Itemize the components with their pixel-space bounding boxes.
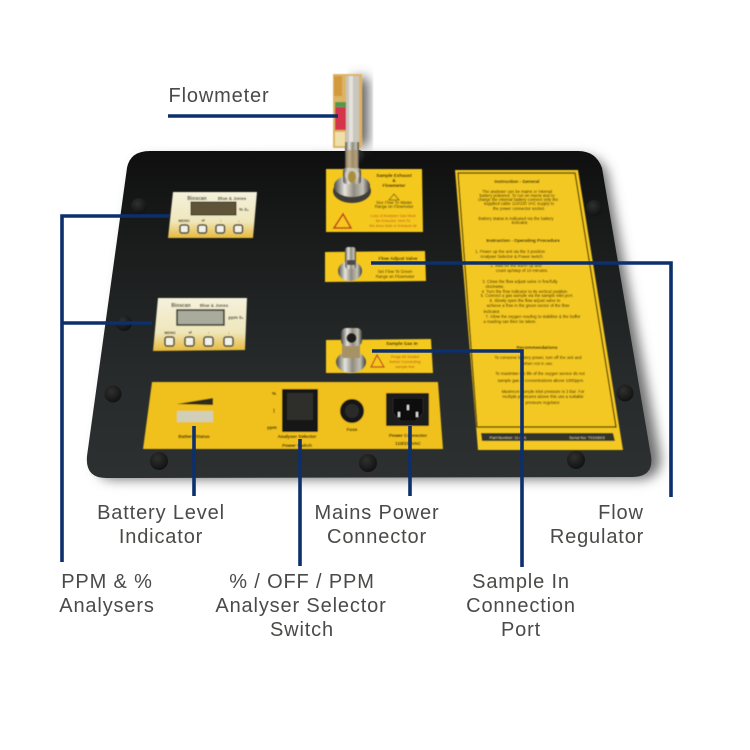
instructions label: when not in use.	[523, 361, 553, 366]
instructions label: charge the internal battery connect only the	[478, 197, 559, 202]
sample gas in label: Purge All Sealed	[391, 355, 419, 359]
power connector	[386, 393, 429, 446]
label: mains power connector: Mains Power	[315, 502, 439, 524]
selector switch: %	[272, 391, 276, 396]
fuse	[340, 399, 364, 432]
selector switch: |	[273, 408, 275, 413]
callout line: selector switch	[298, 439, 302, 566]
battery level indicator	[177, 398, 213, 439]
instructions label: 6. Slowly open the flow adjust valve to	[490, 298, 561, 303]
label: sample in port: Port	[501, 619, 541, 641]
sample exhaust label: the Area Safe or Exhaust all	[369, 224, 417, 228]
label: sample in port: Connection	[466, 595, 576, 617]
instructions label: indicator.	[484, 309, 500, 314]
part number strip	[481, 433, 615, 441]
instructions label: Instruction - General	[495, 179, 539, 184]
instructions label	[455, 170, 623, 450]
flow adjust valve label	[325, 251, 426, 282]
selector switch: Power Switch	[282, 443, 312, 448]
callout line: mains power	[408, 426, 412, 496]
icon: warning triangle	[334, 214, 351, 228]
label: battery level indicator: Indicator	[119, 526, 203, 548]
instructions label: 3. Close the flow adjust valve in fine/fully	[482, 279, 558, 284]
power connector: 110/230VAC	[395, 441, 422, 446]
instructions label: Maximum sample inlet pressure is 3 Bar. For	[502, 389, 585, 394]
analyser: ppm: Bioscan	[171, 303, 191, 309]
fuse: Fuse	[347, 427, 358, 432]
label: sample in port: Sample In	[472, 571, 570, 593]
flowmeter	[333, 74, 371, 203]
selector switch	[267, 389, 318, 448]
analyser: ppm: MENU	[164, 331, 176, 335]
analyser: percent: Bioscan	[187, 196, 207, 202]
callout line: analysers	[62, 216, 170, 562]
flow adjust valve fitting	[338, 247, 362, 281]
instructions label: Recommendations	[516, 345, 558, 350]
analyser buttons	[180, 225, 242, 233]
flow adjust valve label: Flow Adjust Valve	[379, 256, 418, 261]
instructions label: 2. Wait for the warm up and	[490, 263, 542, 268]
label: flowmeter: Flowmeter	[168, 85, 270, 107]
icon: warning triangle	[371, 355, 384, 367]
label: mains power connector: Connector	[327, 526, 427, 548]
instructions label: To maximise the life of the oxygen sensor do not	[495, 371, 586, 376]
selector switch: Analyser Selector	[278, 434, 317, 439]
selector switch: ppm	[267, 425, 277, 430]
analyser: ppm	[153, 298, 247, 351]
instructions label: multiple pressures above this use a suitable	[502, 394, 584, 399]
instructions label: count up/step of 10 minutes.	[496, 268, 548, 273]
analyser: percent: ↑	[220, 219, 222, 223]
analyser: ppm: ↓	[228, 331, 230, 335]
analyser: ppm: ↑	[208, 331, 210, 335]
sample exhaust label: Sample Exhaust	[376, 173, 412, 178]
instructions label: The analyser can be mains or internal	[482, 189, 552, 194]
flow adjust valve label: Set Flow To Green	[378, 269, 413, 274]
sample exhaust label: Range on Flowmeter	[375, 204, 414, 209]
sample exhaust label: Loss of Analyser Gas Must	[370, 214, 417, 218]
analyser: percent: % 0₂	[239, 207, 249, 212]
instructions label: 4. Turn the flow indicator to its vertical position.	[482, 289, 568, 294]
instructions label: achieve a flow in the green sector of the flow	[487, 303, 570, 308]
instructions label: battery powered. To run on mains and to	[480, 193, 555, 198]
sample exhaust label: &	[392, 178, 396, 183]
analyser: percent: ⏎	[200, 218, 205, 223]
sample exhaust label	[326, 169, 423, 232]
panel: black analyser plate	[87, 150, 660, 479]
instructions label: a reading can then be taken.	[483, 319, 537, 324]
instructions label: 1. Power up the unit via the 3 position	[475, 249, 546, 254]
instructions label: the power connector socket.	[493, 206, 545, 211]
lcd display	[177, 310, 224, 325]
label: selector switch: % / OFF / PPM	[229, 571, 375, 593]
label: flow regulator: Regulator	[550, 526, 644, 548]
instructions label: indicator.	[512, 220, 528, 225]
instructions label: sample gas at concentrations above 1000ppm.	[498, 378, 584, 383]
label: analysers: Analysers	[59, 595, 155, 617]
sample exhaust label: Be Ensured. Vent To	[376, 219, 410, 223]
analyser buttons	[165, 337, 233, 346]
analyser: percent: Blue & Jones	[218, 196, 247, 201]
part number strip: Part Number: 11-091	[489, 435, 527, 440]
instructions label: To conserve battery power, turn off the unit and	[494, 355, 582, 360]
label: analysers: PPM & %	[61, 571, 153, 593]
sample gas in label: sample line	[395, 365, 415, 369]
analyser: ppm: ppm 0₂	[228, 315, 244, 320]
callout line: sample in	[372, 351, 522, 567]
callout line: flowmeter	[168, 114, 338, 118]
label: selector switch: Analyser Selector	[215, 595, 387, 617]
instructions label: Analyser Selector & Power switch.	[480, 254, 544, 259]
label: flow regulator: Flow	[598, 502, 644, 524]
callout line: battery level	[192, 426, 196, 496]
analyser: ppm: Blue & Jones	[200, 303, 229, 308]
label: selector switch: Switch	[270, 619, 334, 641]
sample gas in label	[326, 339, 433, 373]
analyser: percent: MENU	[178, 219, 190, 223]
sample gas in label: before Connecting	[389, 360, 421, 364]
sample exhaust label: Flowmeter	[383, 183, 406, 188]
instructions label: Battery status is indicated via the battery	[478, 216, 554, 221]
sample gas in label: Sample Gas In	[386, 341, 418, 346]
sample gas in fitting	[336, 328, 366, 373]
instructions label: Instruction - Operating Procedure	[486, 238, 560, 243]
analyser: percent: ↓	[238, 219, 240, 223]
analyser: percent	[168, 192, 257, 238]
analyser: ppm: ⏎	[187, 330, 192, 335]
lcd display	[191, 202, 236, 215]
instructions label: 7. Allow the oxygen reading to stabilise & the buffer	[486, 314, 581, 319]
flowmeter stem and exhaust fitting	[333, 142, 371, 203]
power connector: Power Connector	[389, 433, 427, 438]
flow adjust valve label: Range on Flowmeter	[376, 274, 415, 279]
instructions label: 5. Connect a gas sample via the sample inlet port.	[481, 293, 573, 298]
label: battery level indicator: Battery Level	[97, 502, 225, 524]
instructions label: pressure regulator.	[526, 400, 560, 405]
instructions label: clockwise.	[485, 284, 505, 289]
battery level indicator: Battery Status	[178, 434, 210, 439]
icon: small warning symbol	[389, 194, 399, 200]
sample exhaust label: See Flow To Waste	[376, 200, 413, 205]
part number strip: Serial No: T91089/3	[569, 435, 606, 440]
plate screws	[104, 150, 634, 472]
instructions label: supplied cable 110/230 VAC supply to	[484, 201, 555, 206]
control strip	[143, 382, 443, 449]
callout line: flow regulator	[371, 263, 671, 497]
